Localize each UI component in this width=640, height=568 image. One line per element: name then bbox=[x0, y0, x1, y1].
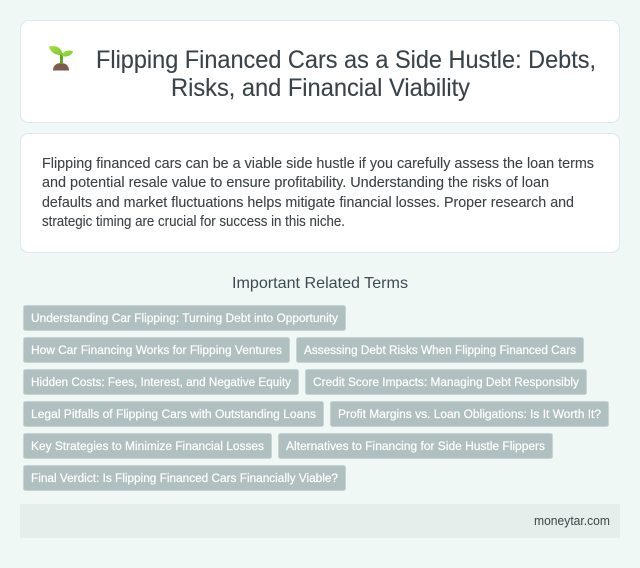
tag 3: Assessing Debt Risks When Flipping Financed Cars bbox=[304, 343, 576, 357]
tag 4: Hidden Costs: Fees, Interest, and Negative Equity bbox=[31, 375, 292, 389]
tag 6 bbox=[24, 402, 324, 426]
tag 10 bbox=[24, 466, 346, 490]
tag 3 bbox=[296, 338, 584, 362]
heading: related terms: Important Related Terms bbox=[232, 275, 408, 292]
tag 10: Final Verdict: Is Flipping Financed Cars Financially Viable? bbox=[31, 471, 338, 485]
tags: related terms bbox=[24, 306, 608, 490]
panel: summary: defaults and market fluctuations helps mitigate financial losses. Proper research and bbox=[42, 195, 574, 211]
panel: summary: strategic timing are crucial for success in this niche. bbox=[42, 214, 345, 230]
tag 7 bbox=[330, 402, 608, 426]
panel: summary: Flipping financed cars can be a viable side hustle if you carefully assess the loan terms bbox=[42, 156, 594, 172]
panel: title card bbox=[20, 20, 620, 122]
footer bbox=[20, 504, 620, 538]
tag 9: Alternatives to Financing for Side Hustle Flippers bbox=[286, 439, 545, 453]
tag 4 bbox=[24, 370, 298, 394]
tag 1: Understanding Car Flipping: Turning Debt into Opportunity bbox=[31, 311, 339, 325]
tag 6: Legal Pitfalls of Flipping Cars with Outstanding Loans bbox=[31, 407, 316, 421]
tag 9 bbox=[278, 434, 552, 458]
tag 8: Key Strategies to Minimize Financial Losses bbox=[31, 439, 264, 453]
tag 2 bbox=[24, 338, 290, 362]
footer: moneytar.com bbox=[534, 514, 610, 528]
tag 5: Credit Score Impacts: Managing Debt Responsibly bbox=[313, 375, 580, 389]
title: Risks, and Financial Viability bbox=[171, 74, 470, 102]
title: Flipping Financed Cars as a Side Hustle: Debts, bbox=[96, 46, 596, 74]
panel: summary: and potential resale value to ensure profitability. Understanding the risks of loan bbox=[42, 175, 549, 191]
title bbox=[96, 46, 596, 102]
panel: summary bbox=[20, 134, 620, 252]
tag 5 bbox=[306, 370, 586, 394]
icon: seedling bbox=[49, 46, 73, 70]
tag 1 bbox=[24, 306, 346, 330]
tag 2: How Car Financing Works for Flipping Ventures bbox=[31, 343, 282, 357]
tag 8 bbox=[24, 434, 272, 458]
tag 7: Profit Margins vs. Loan Obligations: Is It Worth It? bbox=[338, 407, 601, 421]
